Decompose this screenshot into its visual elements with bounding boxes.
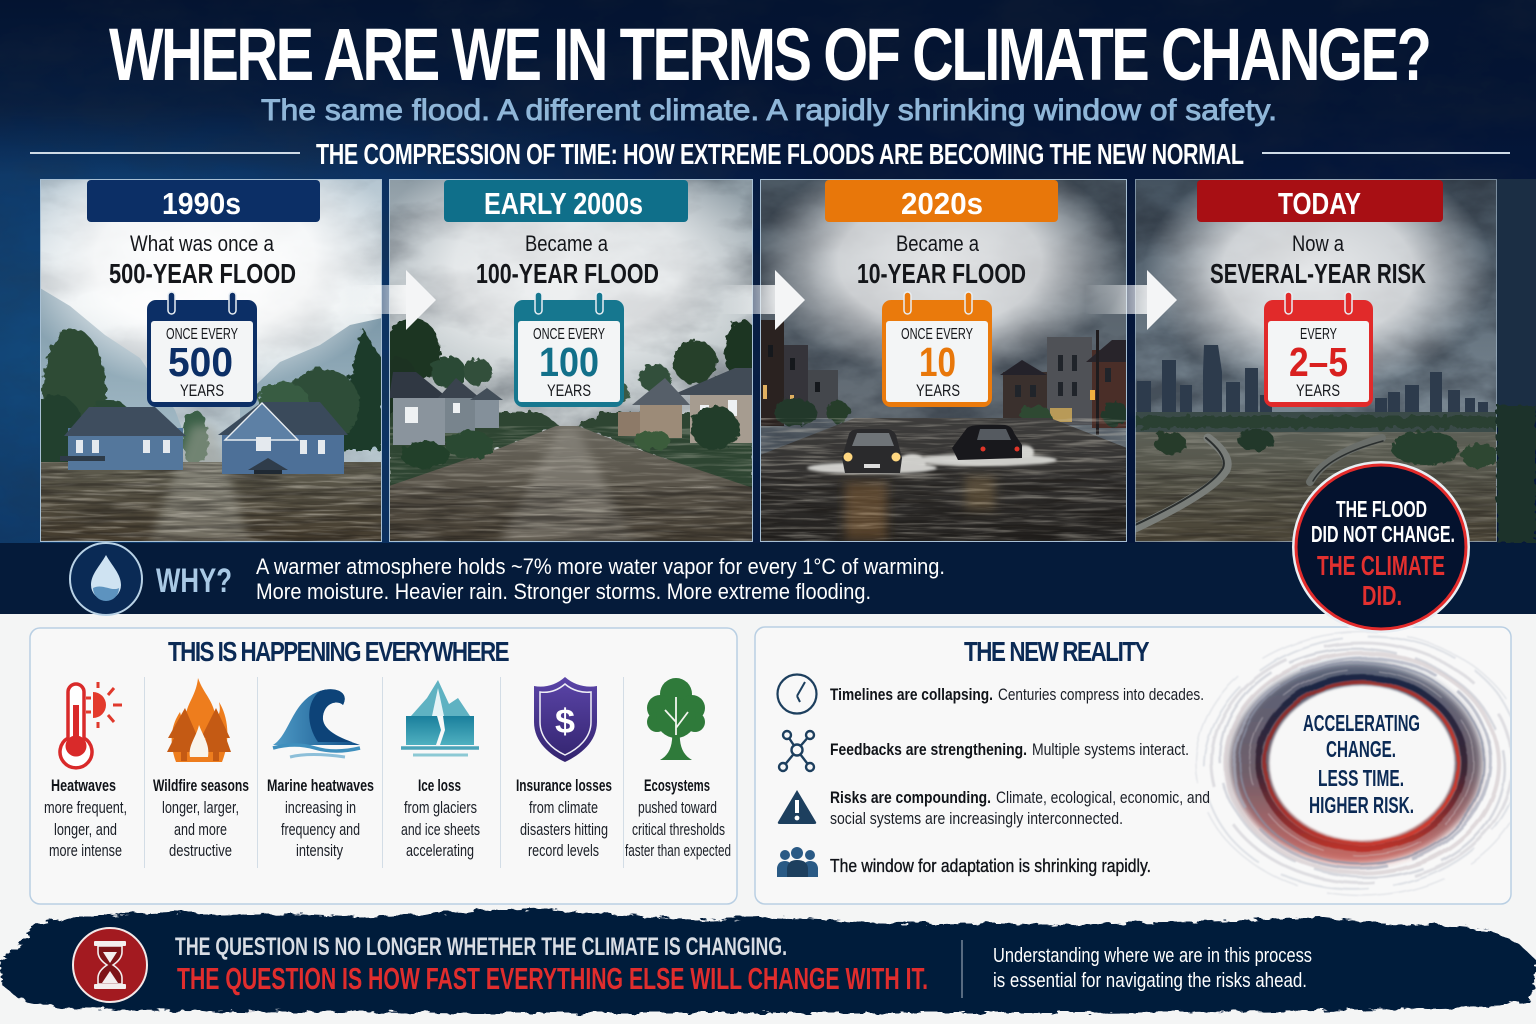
calendar: every 2-5 years: YEARS (1296, 382, 1340, 400)
icon: shield with dollar sign (534, 677, 597, 762)
row: window for adaptation (777, 847, 1151, 877)
column: marine heatwaves: intensity (296, 842, 344, 860)
column: marine heatwaves: increasing in (285, 799, 356, 817)
why explanation: More moisture. Heavier rain. Stronger storms. More extreme flooding. (256, 579, 871, 604)
callout: the flood did not change: THE FLOOD (1336, 496, 1427, 522)
row: timelines: Timelines are collapsing. (830, 685, 993, 704)
icon: hourglass (73, 928, 147, 1002)
curved highways (1135, 438, 1383, 528)
right buildings (1000, 330, 1127, 435)
roadside foliage (389, 412, 753, 492)
panel: this is happening everywhere (30, 628, 737, 904)
accelerating vortex (1195, 630, 1510, 896)
photo: flooded suburban street (390, 180, 752, 541)
year tab: 1990s (162, 186, 241, 221)
left house (60, 407, 186, 470)
flood label (857, 231, 1026, 289)
row: risks: social systems are increasingly interconnected. (830, 810, 1123, 828)
heading: THE NEW REALITY (964, 637, 1150, 668)
vortex message: CHANGE. (1326, 736, 1396, 762)
closing note (993, 945, 1312, 992)
icon: people (777, 847, 818, 877)
closing question: THE QUESTION IS HOW FAST EVERYTHING ELSE WILL CHANGE WITH IT. (177, 961, 928, 996)
car front (842, 429, 902, 473)
callout: the flood did not change: DID NOT CHANGE. (1311, 521, 1455, 547)
row: risks: Risks are compounding. (830, 788, 991, 807)
panel: 1990s (40, 179, 382, 542)
column: heatwaves: more frequent, (44, 799, 127, 817)
column: insurance losses: record levels (528, 842, 599, 860)
arrow: 2020s to today (1085, 270, 1177, 330)
flood label: 10-YEAR FLOOD (857, 258, 1026, 289)
icon: iceberg (401, 680, 479, 755)
column: insurance losses: disasters hitting (520, 821, 608, 839)
closing note: is essential for navigating the risks ahead. (993, 970, 1307, 992)
left buildings (760, 320, 838, 426)
column: wildfire seasons: Wildfire seasons (153, 776, 249, 795)
column: marine heatwaves (267, 689, 374, 860)
skyline (1137, 345, 1488, 412)
icon: thermometer and sun (60, 682, 122, 768)
column: heatwaves: Heatwaves (51, 776, 116, 795)
right house (218, 402, 348, 474)
closing note: Understanding where we are in this process (993, 945, 1312, 967)
dark forest beyond the right edge of the today photo (1497, 179, 1536, 543)
calendar: every 2-5 years: 2–5 (1289, 339, 1348, 385)
why heading: WHY? (156, 562, 232, 600)
calendar: once every 500 years: YEARS (180, 382, 224, 400)
row: feedbacks: Feedbacks are strengthening. (830, 740, 1027, 759)
column: ice loss: and ice sheets (401, 821, 480, 839)
flood label: 500-YEAR FLOOD (109, 258, 296, 289)
column: ice loss: accelerating (406, 842, 474, 860)
column: heatwaves: more intense (49, 842, 122, 860)
calendar: every 2-5 years: EVERY (1300, 326, 1337, 343)
column: wildfire seasons: and more (174, 821, 227, 839)
column: heatwaves (44, 682, 127, 860)
icon: water drop (70, 543, 142, 615)
column: wildfire seasons: destructive (169, 842, 232, 860)
row: feedbacks (779, 731, 1189, 771)
panel: early 2000s (389, 179, 753, 542)
left houses (389, 372, 503, 445)
bottom banner (0, 908, 1536, 1013)
calendar: every 2-5 years (1264, 292, 1373, 407)
closing question (175, 933, 928, 996)
column: ice loss: from glaciers (404, 799, 477, 817)
row: risks: Climate, ecological, economic, and (996, 789, 1210, 807)
flood label: 100-YEAR FLOOD (476, 258, 659, 289)
year tab (444, 180, 688, 222)
flood label (476, 231, 659, 289)
icon: shield with dollar sign: $ (555, 703, 575, 741)
calendar: once every 10 years (882, 292, 992, 407)
column: ecosystems (625, 678, 731, 860)
calendar: once every 100 years: YEARS (547, 382, 591, 400)
vortex message: HIGHER RISK. (1309, 792, 1414, 818)
icon: clock (778, 674, 816, 714)
calendar: once every 100 years (514, 292, 624, 407)
photo: cars driving through a flooded city street (761, 180, 1126, 541)
panel: today (1135, 152, 1498, 542)
icon: tree (647, 678, 705, 760)
car rear (952, 425, 1022, 460)
why explanation (256, 554, 945, 604)
flood label: SEVERAL-YEAR RISK (1210, 258, 1426, 289)
year tab (87, 180, 320, 222)
column: ice loss: Ice loss (418, 776, 461, 795)
column: heatwaves: longer, and (54, 821, 117, 839)
year tab: EARLY 2000s (484, 186, 643, 221)
vortex message: LESS TIME. (1318, 765, 1404, 791)
calendar: once every 100 years: 100 (539, 339, 599, 385)
why strip (0, 543, 1536, 615)
column: ecosystems: faster than expected (625, 842, 731, 860)
column: marine heatwaves: Marine heatwaves (267, 776, 374, 795)
water spray (807, 445, 1057, 474)
calendar: once every 500 years (147, 292, 257, 407)
flood label: Became a (896, 231, 980, 256)
right houses (618, 368, 753, 443)
icon: network (779, 731, 814, 771)
row: timelines: Centuries compress into decades. (998, 686, 1204, 704)
brush stroke background (0, 908, 1536, 1013)
why explanation: A warmer atmosphere holds ~7% more water vapor for every 1°C of warming. (256, 554, 945, 579)
year tab: TODAY (1278, 186, 1361, 221)
column: insurance losses: Insurance losses (516, 776, 612, 795)
callout: the flood did not change (1294, 463, 1468, 631)
year tab (825, 180, 1058, 222)
year tab (1197, 180, 1443, 222)
calendar: once every 100 years: ONCE EVERY (533, 326, 605, 343)
photo: flooded houses under mountains (41, 180, 381, 541)
flood label (1210, 231, 1426, 289)
icon: warning triangle (778, 790, 816, 824)
arrow: 1990s to early 2000s (350, 270, 436, 330)
closing question: THE QUESTION IS NO LONGER WHETHER THE CLIMATE IS CHANGING. (175, 933, 787, 961)
year tab: 2020s (901, 186, 983, 221)
flood label: Became a (525, 231, 609, 256)
column: ecosystems: pushed toward (638, 799, 717, 817)
vortex message: ACCELERATING (1303, 710, 1420, 736)
calendar: once every 10 years: YEARS (916, 382, 960, 400)
icon: flames and trees (167, 678, 231, 762)
column: wildfire seasons (153, 678, 249, 860)
heading: THIS IS HAPPENING EVERYWHERE (168, 637, 510, 668)
column: insurance losses (516, 677, 612, 860)
flood label: What was once a (130, 231, 275, 256)
icon: wave (273, 689, 360, 757)
column: ecosystems: critical thresholds (632, 821, 725, 839)
subtitle: The same flood. A different climate. A rapidly shrinking window of safety. (261, 94, 1277, 127)
calendar: once every 10 years: ONCE EVERY (901, 326, 973, 343)
title: WHERE ARE WE IN TERMS OF CLIMATE CHANGE? (109, 14, 1432, 97)
column: ecosystems: Ecosystems (644, 776, 710, 795)
row: risks (778, 788, 1210, 828)
panel: the new reality (755, 621, 1532, 905)
dark navy header background (0, 0, 1536, 614)
row: window for adaptation: The window for adaptation is shrinking rapidly. (830, 856, 1151, 876)
row: feedbacks: Multiple systems interact. (1032, 741, 1189, 759)
photo: flooded highway below a city skyline (1135, 152, 1498, 542)
column: marine heatwaves: frequency and (281, 821, 360, 839)
callout: the flood did not change: DID. (1362, 580, 1402, 611)
calendar: once every 500 years: 500 (168, 339, 233, 385)
column: ice loss (401, 680, 480, 860)
column: insurance losses: from climate (529, 799, 598, 817)
callout: the flood did not change: THE CLIMATE (1317, 550, 1445, 581)
flood label (109, 231, 296, 289)
panel: 2020s (755, 147, 1128, 542)
arrow: early 2000s to 2020s (720, 270, 805, 330)
row: timelines (778, 674, 1204, 714)
calendar: once every 10 years: 10 (919, 339, 956, 385)
calendar: once every 500 years: ONCE EVERY (166, 326, 238, 343)
flood label: Now a (1292, 231, 1345, 256)
section heading with rules: THE COMPRESSION OF TIME: HOW EXTREME FLOODS ARE BECOMING THE NEW NORMAL (316, 139, 1244, 171)
vortex message (1303, 710, 1420, 818)
column: wildfire seasons: longer, larger, (162, 799, 239, 817)
